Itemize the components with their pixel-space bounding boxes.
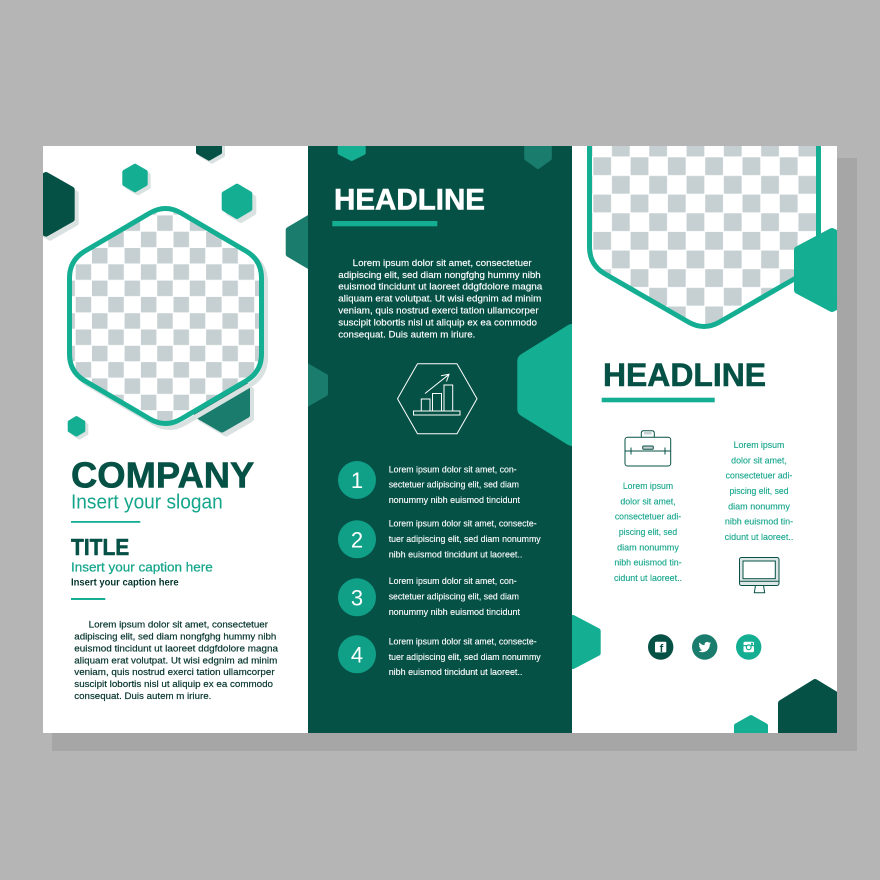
list item 1: Lorem ipsum dolor sit amet, con- — [389, 464, 517, 474]
image placeholder: left hexagon frame — [60, 200, 270, 435]
text column 2: cidunt ut laoreet.. — [725, 532, 793, 542]
list item 1: nonummy nibh euismod tincidunt — [389, 495, 520, 505]
icon: instagram — [736, 634, 761, 660]
left body text: Lorem ipsum dolor sit amet, consectetuer — [89, 620, 269, 631]
text column 1: nibh euismod tin- — [614, 558, 682, 568]
left body text — [74, 620, 279, 702]
slogan: Insert your slogan — [71, 492, 223, 514]
company name: COMPANY — [71, 455, 254, 496]
middle body text: veniam, quis nostrud exerci tation ullamcorper — [338, 305, 539, 316]
headline underline — [332, 221, 437, 226]
icon: twitter — [692, 634, 717, 660]
text column 2 — [725, 440, 793, 542]
list item 4: 4 — [351, 642, 363, 667]
list item 1: 1 — [351, 468, 363, 493]
left body text: consequat. Duis autem m iriure. — [74, 691, 211, 702]
right panel hexagon decorations — [572, 228, 837, 733]
left body text: euismod tincidunt ut laoreet ddgfdolore magna — [74, 644, 279, 655]
left body text: veniam, quis nostrud exerci tation ullamcorper — [74, 667, 275, 678]
hexagon: small teal upper — [124, 166, 149, 193]
middle body text: Lorem ipsum dolor sit amet, consectetuer — [353, 258, 533, 269]
list item 3 — [338, 576, 520, 617]
icon: briefcase — [625, 431, 671, 466]
left body text: suscipit lobortis nisl ut aliquip ex ea commodo — [74, 679, 273, 690]
list item 3: nonummy nibh euismod tincidunt — [389, 607, 520, 617]
list item 3: 3 — [351, 585, 363, 610]
list item 4: tuer adipiscing elit, sed diam nonummy — [389, 652, 541, 662]
text column 2: Lorem ipsum — [734, 440, 784, 450]
list item 3: sectetuer adipiscing elit, sed diam — [389, 592, 519, 602]
list item 3: Lorem ipsum dolor sit amet, con- — [389, 576, 517, 586]
text column 2: piscing elit, sed — [730, 486, 788, 496]
hexagon: mid tone under image frame — [197, 372, 251, 434]
text column 2: nibh euismod tin- — [725, 517, 793, 527]
text column 1: cidunt ut laoreet.. — [614, 573, 682, 583]
hexagon: medium teal upper right — [224, 186, 254, 221]
brochure drop shadow — [52, 158, 857, 751]
list item 1 — [338, 461, 520, 505]
left body text: aliquam erat volutpat. Ut wisi edgnim ad minim — [74, 655, 277, 666]
headline underline — [602, 398, 715, 402]
text column 1: piscing elit, sed — [619, 527, 677, 537]
middle body text — [338, 258, 543, 340]
slogan divider — [71, 521, 140, 523]
panel: middle — [308, 146, 572, 733]
left body text: adipiscing elit, sed diam nongfghg hummy nibh — [74, 632, 276, 643]
text column 2: dolor sit amet, — [731, 455, 787, 465]
hexagon: mid tone at fold — [286, 215, 308, 269]
numbered list — [338, 461, 541, 677]
icon: facebook: f — [660, 643, 664, 655]
caption divider — [71, 598, 105, 600]
icon: desktop monitor — [740, 558, 779, 593]
text column 1: dolor sit amet, — [620, 496, 676, 506]
middle panel hexagon decorations — [308, 146, 572, 446]
panel: right — [572, 146, 837, 733]
list item 4: Lorem ipsum dolor sit amet, consecte- — [389, 637, 537, 647]
list item 4: nibh euismod tincidunt ut laoreet.. — [389, 667, 522, 677]
text column 1: Lorem ipsum — [623, 481, 673, 491]
text column 1 — [614, 481, 682, 583]
list item 1: sectetuer adipiscing elit, sed diam — [389, 480, 519, 490]
panel: left cover — [43, 146, 308, 733]
icon: growth chart in hexagon — [398, 364, 477, 434]
social icons — [648, 634, 761, 660]
middle body text: euismod tincidunt ut laoreet ddgfdolore magna — [338, 282, 543, 293]
text column 1: consectetuer adi- — [615, 512, 681, 522]
title: TITLE — [71, 534, 129, 560]
hexagon: small teal lower — [69, 418, 87, 438]
middle body text: adipiscing elit, sed diam nongfghg hummy nibh — [338, 270, 541, 281]
list item 2: nibh euismod tincidunt ut laoreet.. — [389, 549, 522, 559]
text column 1: diam nonummy — [617, 543, 679, 553]
list item 2 — [338, 519, 541, 559]
text column 2: diam nonummy — [728, 501, 790, 511]
teal caption: Insert your caption here — [71, 559, 213, 574]
list item 2: tuer adipiscing elit, sed diam nonummy — [389, 534, 541, 544]
image placeholder: right hexagon frame — [587, 146, 821, 329]
headline: HEADLINE — [603, 357, 766, 393]
middle body text: consequat. Duis autem m iriure. — [338, 329, 475, 340]
hexagon: top dark — [199, 146, 225, 164]
text column 2: consectetuer adi- — [726, 471, 792, 481]
middle body text: suscipit lobortis nisl ut aliquip ex ea commodo — [338, 317, 537, 328]
middle body text: aliquam erat volutpat. Ut wisi edgnim ad minim — [338, 294, 541, 305]
list item 2: 2 — [351, 527, 363, 552]
left panel hexagon decorations — [20, 130, 340, 438]
dark caption: Insert your caption here — [71, 578, 179, 589]
headline: HEADLINE — [334, 183, 485, 216]
list item 4 — [338, 635, 541, 677]
list item 2: Lorem ipsum dolor sit amet, consecte- — [389, 519, 537, 529]
hexagon: left dark — [43, 172, 79, 241]
